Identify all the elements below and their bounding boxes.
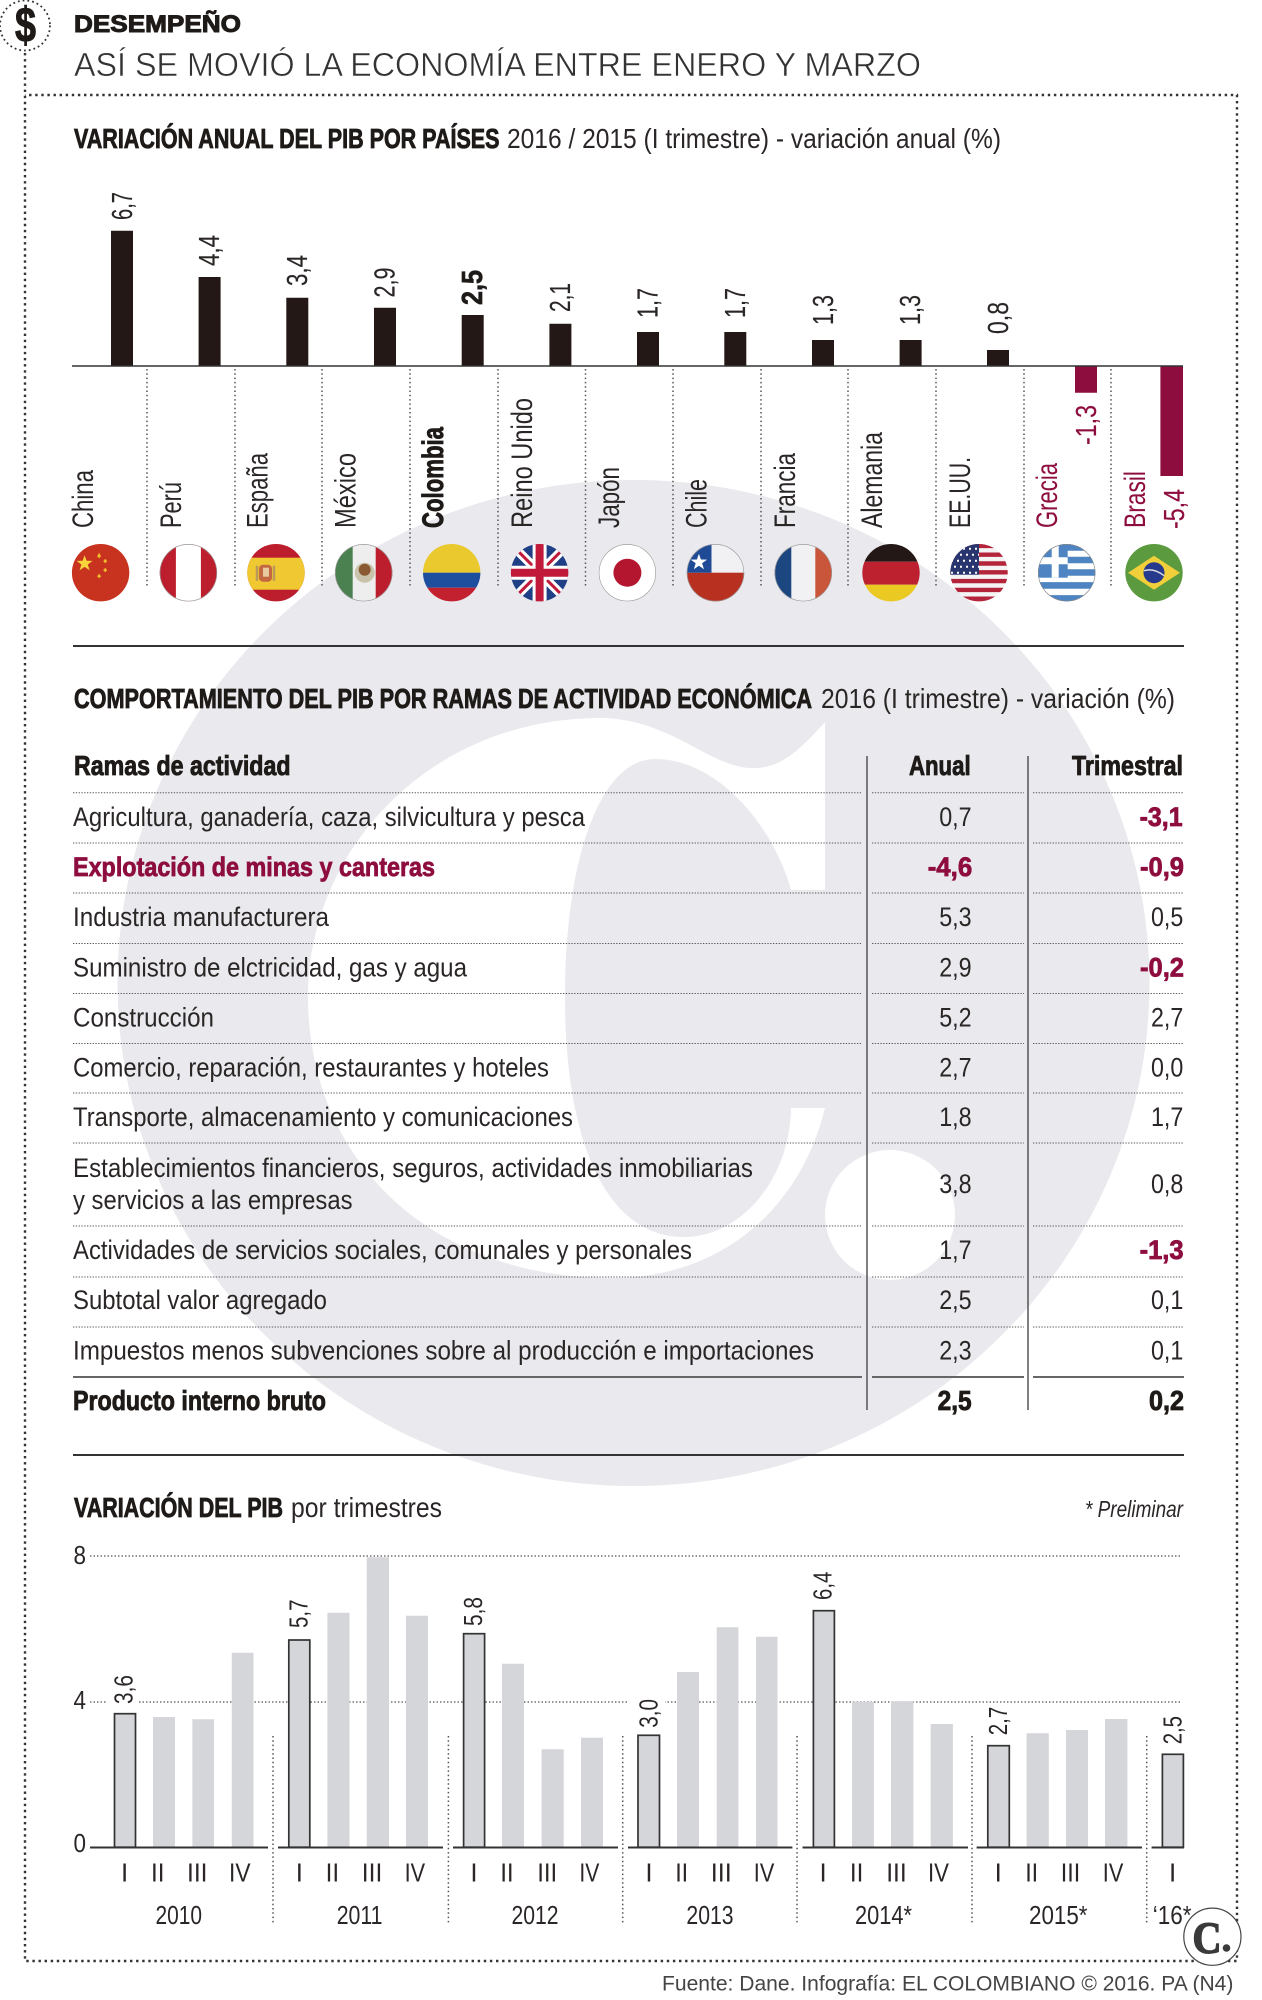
positive bars [111,231,1009,366]
row: impuestos: 2,3 [939,1336,972,1366]
row: establecimientos financieros [73,1153,1183,1215]
y axis labels: 4 [74,1685,86,1715]
year labels: 2015* [1029,1900,1088,1930]
row: agricultura [73,802,1183,832]
bar values: 6,4 [808,1572,838,1600]
country names [67,398,1152,528]
row: comercio: Comercio, reparación, restaurantes y hoteles [73,1052,549,1082]
negative bars [1075,366,1183,476]
icon: flag Francia [774,544,832,602]
icon: dollar sign [0,0,50,53]
country names: España [242,453,274,528]
quarter labels: II [500,1858,514,1888]
row: servicios sociales: Actividades de servicios sociales, comunales y personales [73,1235,692,1265]
row: construcción [73,1002,1183,1032]
row: servicios sociales [73,1235,1184,1265]
quarter labels: IV [579,1858,600,1888]
icon: flag China [72,544,130,602]
year labels: ‘16* [1153,1900,1192,1930]
quarter labels: II [1025,1858,1038,1888]
row: agricultura: -3,1 [1140,802,1183,832]
row: establecimientos financieros: Establecimientos financieros, seguros, actividades inmobiliarias [73,1153,753,1183]
bar values [109,1572,1187,1744]
row: construcción: Construcción [73,1002,214,1032]
row: industria: 5,3 [939,902,972,932]
icon: flag EE.UU. [950,544,1008,602]
row: industria [73,902,1183,932]
watermark: large C logo [118,480,1150,1486]
bar values: 2,5 [1157,1716,1187,1744]
logo: El Colombiano C: C [1192,1914,1222,1962]
country names: Perú [155,482,188,528]
row: suministro: 2,9 [939,952,972,982]
quarter labels: II [675,1858,688,1888]
note: preliminar: * Preliminar [1085,1496,1184,1522]
zero axis [90,1846,1184,1848]
country names: China [67,470,100,528]
country names: Japón [593,467,626,528]
row: minas y canteras: -0,9 [1140,852,1184,882]
bar values: -1,3 [1071,405,1103,445]
row: producto interno bruto: 0,2 [1149,1385,1184,1416]
icon: flag España [247,544,305,602]
bar values: 4,4 [194,235,226,266]
country names: Grecia [1031,463,1064,528]
row: transporte [73,1102,1183,1132]
quarter labels: I [470,1858,478,1888]
quarter labels: I [121,1858,128,1888]
table header: Ramas de actividad [74,750,290,781]
bar values: 1,7 [720,288,752,318]
logo: El Colombiano C [1184,1908,1241,1965]
row: producto interno bruto: Producto interno bruto [73,1385,326,1416]
table header: Anual [909,750,971,781]
row: suministro: -0,2 [1140,952,1184,982]
row: producto interno bruto [73,1385,1184,1416]
bar values: 3,0 [633,1699,663,1728]
row: minas y canteras [73,852,1184,882]
row: establecimientos financieros: 0,8 [1151,1169,1183,1199]
icon: dollar sign: $ [15,0,36,53]
icon: flag Chile [686,544,744,602]
bar values: 0,8 [983,302,1015,334]
icon: flag México [335,544,393,602]
y axis labels: 8 [74,1540,86,1570]
icon: flag Reino Unido [511,544,569,602]
bar values: 2,7 [983,1707,1013,1735]
quarter labels: II [850,1858,863,1888]
row: transporte: 1,7 [1151,1102,1183,1132]
bar values: -5,4 [1159,489,1191,529]
row: comercio: 2,7 [939,1052,972,1082]
quarter labels: IV [229,1858,251,1888]
heading: variación anual por países: VARIACIÓN ANUAL DEL PIB POR PAÍSES [74,123,500,154]
year labels: 2010 [156,1900,202,1930]
row: impuestos: Impuestos menos subvenciones sobre al producción e importaciones [73,1336,814,1366]
bar values: 5,8 [458,1597,488,1626]
y axis labels [74,1540,86,1858]
heading: variación del PIB por trimestres: por trimestres [291,1492,442,1523]
icon: flag Alemania [862,544,920,602]
quarter labels: III [1061,1858,1080,1888]
row: subtotal [73,1285,1183,1315]
row: transporte: Transporte, almacenamiento y comunicaciones [73,1102,573,1132]
row: agricultura: Agricultura, ganadería, caza, silvicultura y pesca [73,802,585,832]
quarter labels: I [1169,1858,1176,1888]
quarter labels: IV [754,1858,775,1888]
year labels: 2013 [686,1900,734,1930]
bar values: 2,9 [370,268,402,298]
row: establecimientos financieros: y servicios a las empresas [73,1185,352,1215]
heading: comportamiento del PIB: 2016 (I trimestre) - variación (%) [821,683,1175,714]
bar values: 2,1 [545,283,577,312]
country names: EE.UU. [944,457,977,528]
quarter labels: III [886,1858,907,1888]
quarter labels: III [187,1858,208,1888]
grey bars [153,1557,1127,1847]
country names: Reino Unido [506,398,539,528]
row: establecimientos financieros: 3,8 [939,1169,972,1199]
bar values: 1,3 [808,295,840,325]
kicker: DESEMPEÑO [74,10,241,38]
country names: Colombia [417,427,450,528]
row: industria: Industria manufacturera [73,902,329,932]
row: comercio: 0,0 [1151,1052,1183,1082]
row: construcción: 2,7 [1151,1002,1183,1032]
quarter labels: II [326,1858,339,1888]
icon: flag Colombia [423,544,481,602]
quarter labels: II [151,1858,164,1888]
heading: variación anual por países [74,123,1001,154]
row: transporte: 1,8 [939,1102,972,1132]
outlined first-quarter bars [114,1611,1183,1847]
row: subtotal: Subtotal valor agregado [73,1285,327,1315]
heading: comportamiento del PIB: COMPORTAMIENTO DEL PIB POR RAMAS DE ACTIVIDAD ECONÓMICA [74,683,812,714]
year labels [156,1900,1192,1930]
quarter labels: III [711,1858,732,1888]
bar values: 1,7 [632,288,664,318]
heading: variación del PIB por trimestres: VARIACIÓN DEL PIB [74,1492,283,1523]
quarter labels [121,1858,1176,1888]
table header [74,750,1183,781]
year labels: 2014* [855,1900,912,1930]
quarter labels: I [645,1858,653,1888]
row: subtotal: 0,1 [1151,1285,1183,1315]
quarter labels: IV [928,1858,950,1888]
bar values: 6,7 [107,192,139,220]
row: subtotal: 2,5 [939,1285,972,1315]
flags row [72,544,1183,602]
row: agricultura: 0,7 [939,802,972,832]
y axis labels: 0 [74,1828,86,1858]
quarter labels: I [995,1858,1002,1888]
quarter labels: IV [405,1858,426,1888]
bar values [107,192,1191,529]
bar chart: variación del PIB por trimestres [74,1540,1192,1930]
row: suministro: Suministro de elctricidad, gas y agua [73,952,467,982]
icon: flag Japón [598,544,656,602]
country names: Brasil [1119,471,1152,528]
row: minas y canteras: -4,6 [928,852,972,882]
quarter labels: I [820,1858,827,1888]
country names: Alemania [856,432,889,528]
row: industria: 0,5 [1151,902,1183,932]
bar values: 2,5 [457,270,489,305]
quarter labels: I [296,1858,303,1888]
quarter labels: III [537,1858,557,1888]
row: servicios sociales: 1,7 [939,1235,972,1265]
country names: Chile [680,479,714,528]
table: ramas de actividad [73,750,1184,1416]
bar chart: variación anual por países [67,192,1191,588]
row: minas y canteras: Explotación de minas y canteras [73,852,435,882]
row: suministro [73,952,1184,982]
title: ASÍ SE MOVIÓ LA ECONOMÍA ENTRE ENERO Y MARZO [74,46,921,84]
bar values: 1,3 [895,295,927,325]
icon: flag Perú [159,544,217,602]
row: impuestos: 0,1 [1151,1336,1183,1366]
row: comercio [73,1052,1183,1082]
icon: flag Grecia [1038,544,1096,602]
table header: Trimestral [1072,750,1183,781]
bar values: 5,7 [284,1600,314,1628]
quarter labels: IV [1103,1858,1124,1888]
source credit: Fuente: Dane. Infografía: EL COLOMBIANO © 2016. PA (N4) [662,1972,1233,1996]
row: servicios sociales: -1,3 [1140,1235,1184,1265]
bar values: 3,6 [109,1675,139,1704]
heading: variación anual por países: 2016 / 2015 (I trimestre) - variación anual (%) [507,123,1001,154]
bar values: 3,4 [282,255,314,286]
year labels: 2011 [337,1900,382,1930]
year labels: 2012 [512,1900,558,1930]
country names: México [330,453,362,528]
icon: flag Brasil [1125,544,1183,602]
row: construcción: 5,2 [939,1002,972,1032]
country names: Francia [769,453,802,528]
row: producto interno bruto: 2,5 [938,1385,972,1416]
quarter labels: III [362,1858,382,1888]
